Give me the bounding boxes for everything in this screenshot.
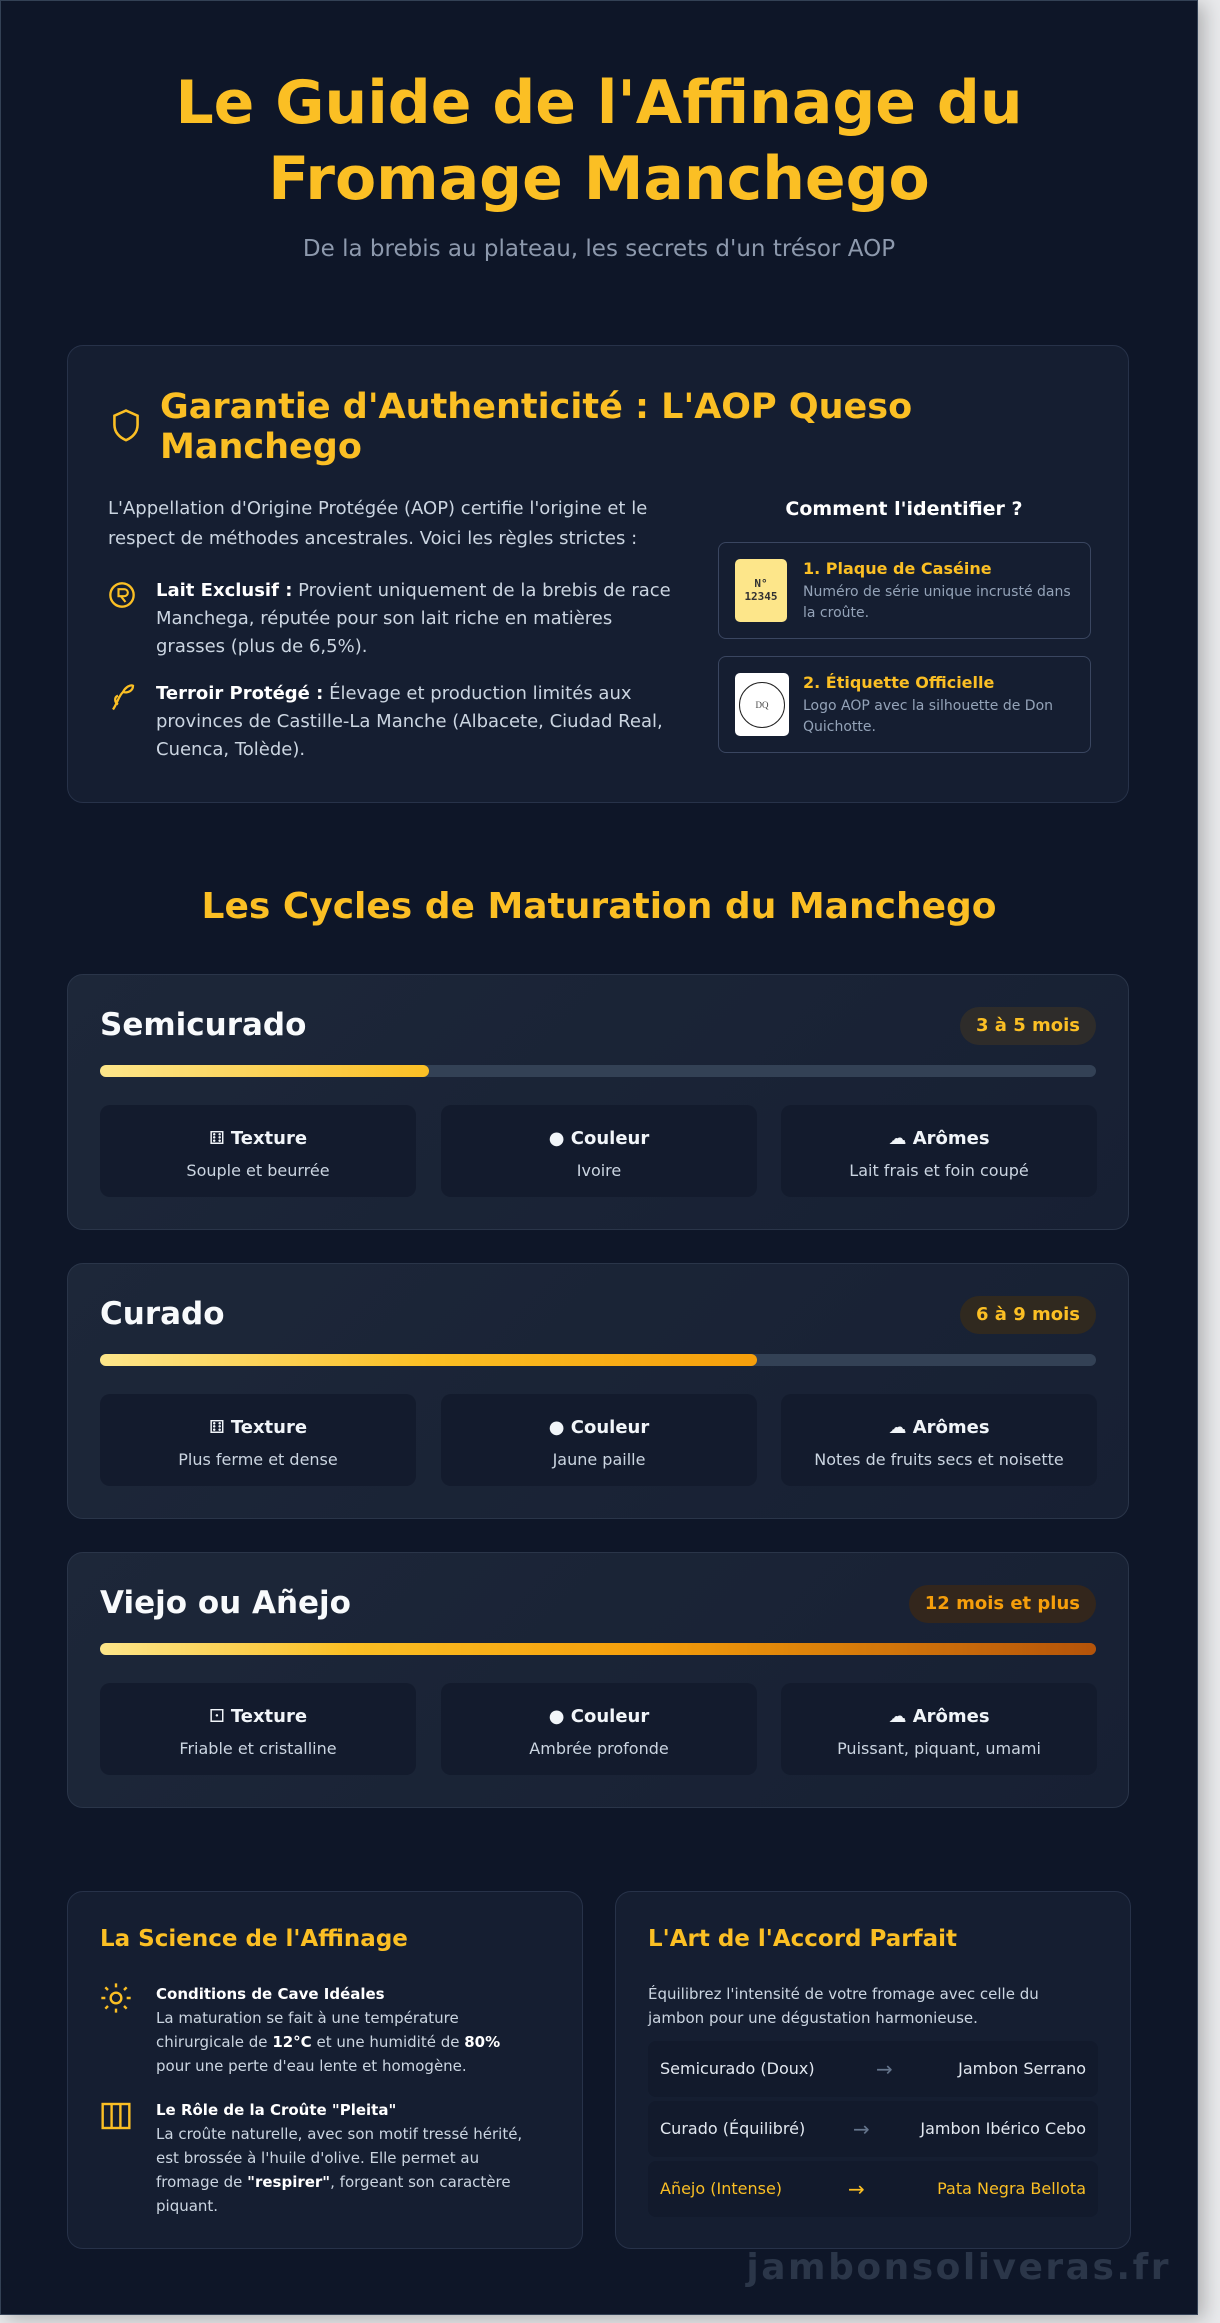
item: cave: La maturation se fait à une température chirurgicale de 12°C et une humidité de 80% pour une perte d'eau lente et homogène. — [156, 2009, 500, 2075]
box: plaque caseine: Numéro de série unique incrusté dans la croûte. — [803, 584, 1071, 621]
row: curado: Curado (Équilibré) — [660, 2119, 805, 2138]
texture: Friable et cristalline — [179, 1739, 337, 1758]
row: semicurado — [648, 2041, 1098, 2097]
texture: ⚅ Texture — [209, 1128, 307, 1149]
aromes — [781, 1394, 1097, 1486]
badge — [909, 1585, 1096, 1623]
heading: Manchego — [160, 427, 362, 467]
heading: comment l'identifier: Comment l'identifier ? — [785, 498, 1023, 520]
intro: Équilibrez l'intensité de votre fromage avec celle du jambon pour une dégustation harmonieuse. — [648, 1985, 1039, 2027]
couleur: ● Couleur — [549, 1128, 649, 1149]
badge — [960, 1007, 1096, 1045]
box: plaque caseine: 1. Plaque de Caséine — [803, 559, 992, 578]
heading — [160, 387, 912, 467]
texture: Plus ferme et dense — [178, 1450, 338, 1469]
rule: terroir: Terroir Protégé : Élevage et production limités aux provinces de Castille-La Manche (Albacete, Ciudad Real, Cuenca, Tolède). — [156, 683, 663, 760]
panel: science — [67, 1891, 583, 2249]
icon: shield — [113, 409, 139, 442]
texture: Souple et beurrée — [186, 1161, 330, 1180]
aromes — [781, 1105, 1097, 1197]
heading: Garantie d'Authenticité : L'AOP Queso — [160, 387, 912, 427]
texture: ⚅ Texture — [209, 1417, 307, 1438]
item: cave — [101, 1983, 500, 2075]
subtitle: De la brebis au plateau, les secrets d'un trésor AOP — [303, 236, 895, 262]
panel: viejo — [67, 1552, 1129, 1808]
item: cave: Conditions de Cave Idéales — [156, 1985, 385, 2003]
row: anejo: → — [848, 2177, 865, 2201]
couleur — [441, 1105, 757, 1197]
texture: ⚀ Texture — [209, 1706, 307, 1727]
panel: AOP authenticity — [67, 345, 1129, 803]
aromes — [781, 1683, 1097, 1775]
box: plaque caseine — [718, 542, 1091, 639]
progress bar — [100, 1065, 1096, 1077]
icon: sprout — [112, 684, 134, 710]
aromes: ☁ Arômes — [888, 1706, 990, 1727]
item: croute — [101, 2101, 522, 2215]
couleur: ● Couleur — [549, 1417, 649, 1438]
panel: semicurado — [67, 974, 1129, 1230]
panel: accords — [615, 1891, 1131, 2249]
aromes: Notes de fruits secs et noisette — [814, 1450, 1064, 1469]
aromes: Puissant, piquant, umami — [837, 1739, 1041, 1758]
row: anejo — [648, 2161, 1098, 2217]
icon: sheep — [109, 582, 135, 608]
aromes: Lait frais et foin coupé — [849, 1161, 1029, 1180]
icon: casein plate — [735, 559, 787, 622]
box: etiquette: 2. Étiquette Officielle — [803, 673, 994, 692]
panel: viejo: Viejo ou Añejo — [100, 1585, 351, 1621]
couleur: ● Couleur — [549, 1706, 649, 1727]
aromes: ☁ Arômes — [888, 1128, 990, 1149]
icon: pleita — [101, 2102, 131, 2130]
badge — [960, 1296, 1096, 1334]
icon: casein plate: 12345 — [744, 590, 778, 603]
texture — [100, 1394, 416, 1486]
rule: lait exclusif: Lait Exclusif : Provient uniquement de la brebis de race Manchega, réputée pour son lait riche en matières grasses (plus de 6,5%). — [156, 580, 671, 657]
icon: casein plate: N° — [754, 577, 768, 590]
item: croute: La croûte naturelle, avec son motif tressé hérité, est brossée à l'huile d'olive. Elle permet au fromage de "respirer", forgeant son caractère piquant. — [156, 2125, 522, 2215]
texture — [100, 1683, 416, 1775]
watermark: jambonsoliveras.fr — [746, 2247, 1171, 2288]
icon: sun — [101, 1983, 131, 2013]
item: croute: Le Rôle de la Croûte "Pleita" — [156, 2101, 396, 2119]
title: Le Guide de l'Affinage du — [175, 68, 1023, 138]
progress bar — [100, 1643, 1096, 1655]
row: semicurado: Semicurado (Doux) — [660, 2059, 815, 2078]
badge: 12 mois et plus — [925, 1593, 1080, 1614]
row: anejo: Añejo (Intense) — [660, 2179, 782, 2198]
panel: curado: Curado — [100, 1296, 225, 1332]
row: semicurado: → — [876, 2057, 893, 2081]
row: curado: Jambon Ibérico Cebo — [920, 2119, 1086, 2138]
title: Fromage Manchego — [268, 144, 930, 214]
couleur: Jaune paille — [553, 1450, 645, 1469]
row: anejo: Pata Negra Bellota — [937, 2179, 1086, 2198]
panel: curado — [67, 1263, 1129, 1519]
aromes: ☁ Arômes — [888, 1417, 990, 1438]
badge: 3 à 5 mois — [976, 1015, 1080, 1036]
icon: DQ logo: DQ — [756, 700, 768, 710]
row: curado: → — [853, 2117, 870, 2141]
progress bar — [100, 1354, 1096, 1366]
couleur — [441, 1683, 757, 1775]
couleur — [441, 1394, 757, 1486]
box: etiquette — [718, 656, 1091, 753]
box: etiquette: Logo AOP avec la silhouette de Don Quichotte. — [803, 698, 1053, 735]
texture — [100, 1105, 416, 1197]
panel: semicurado: Semicurado — [100, 1007, 306, 1043]
icon: DQ logo — [735, 673, 789, 736]
couleur: Ivoire — [577, 1161, 621, 1180]
row: curado — [648, 2101, 1098, 2157]
intro text: L'Appellation d'Origine Protégée (AOP) certifie l'origine et le respect de méthodes ancestrales. Voici les règles strictes : — [108, 498, 647, 549]
title — [175, 68, 1023, 214]
section heading: cycles: Les Cycles de Maturation du Manchego — [202, 886, 996, 927]
badge: 6 à 9 mois — [976, 1304, 1080, 1325]
row: semicurado: Jambon Serrano — [958, 2059, 1086, 2078]
heading: La Science de l'Affinage — [100, 1926, 408, 1952]
heading: L'Art de l'Accord Parfait — [648, 1926, 957, 1952]
couleur: Ambrée profonde — [529, 1739, 669, 1758]
